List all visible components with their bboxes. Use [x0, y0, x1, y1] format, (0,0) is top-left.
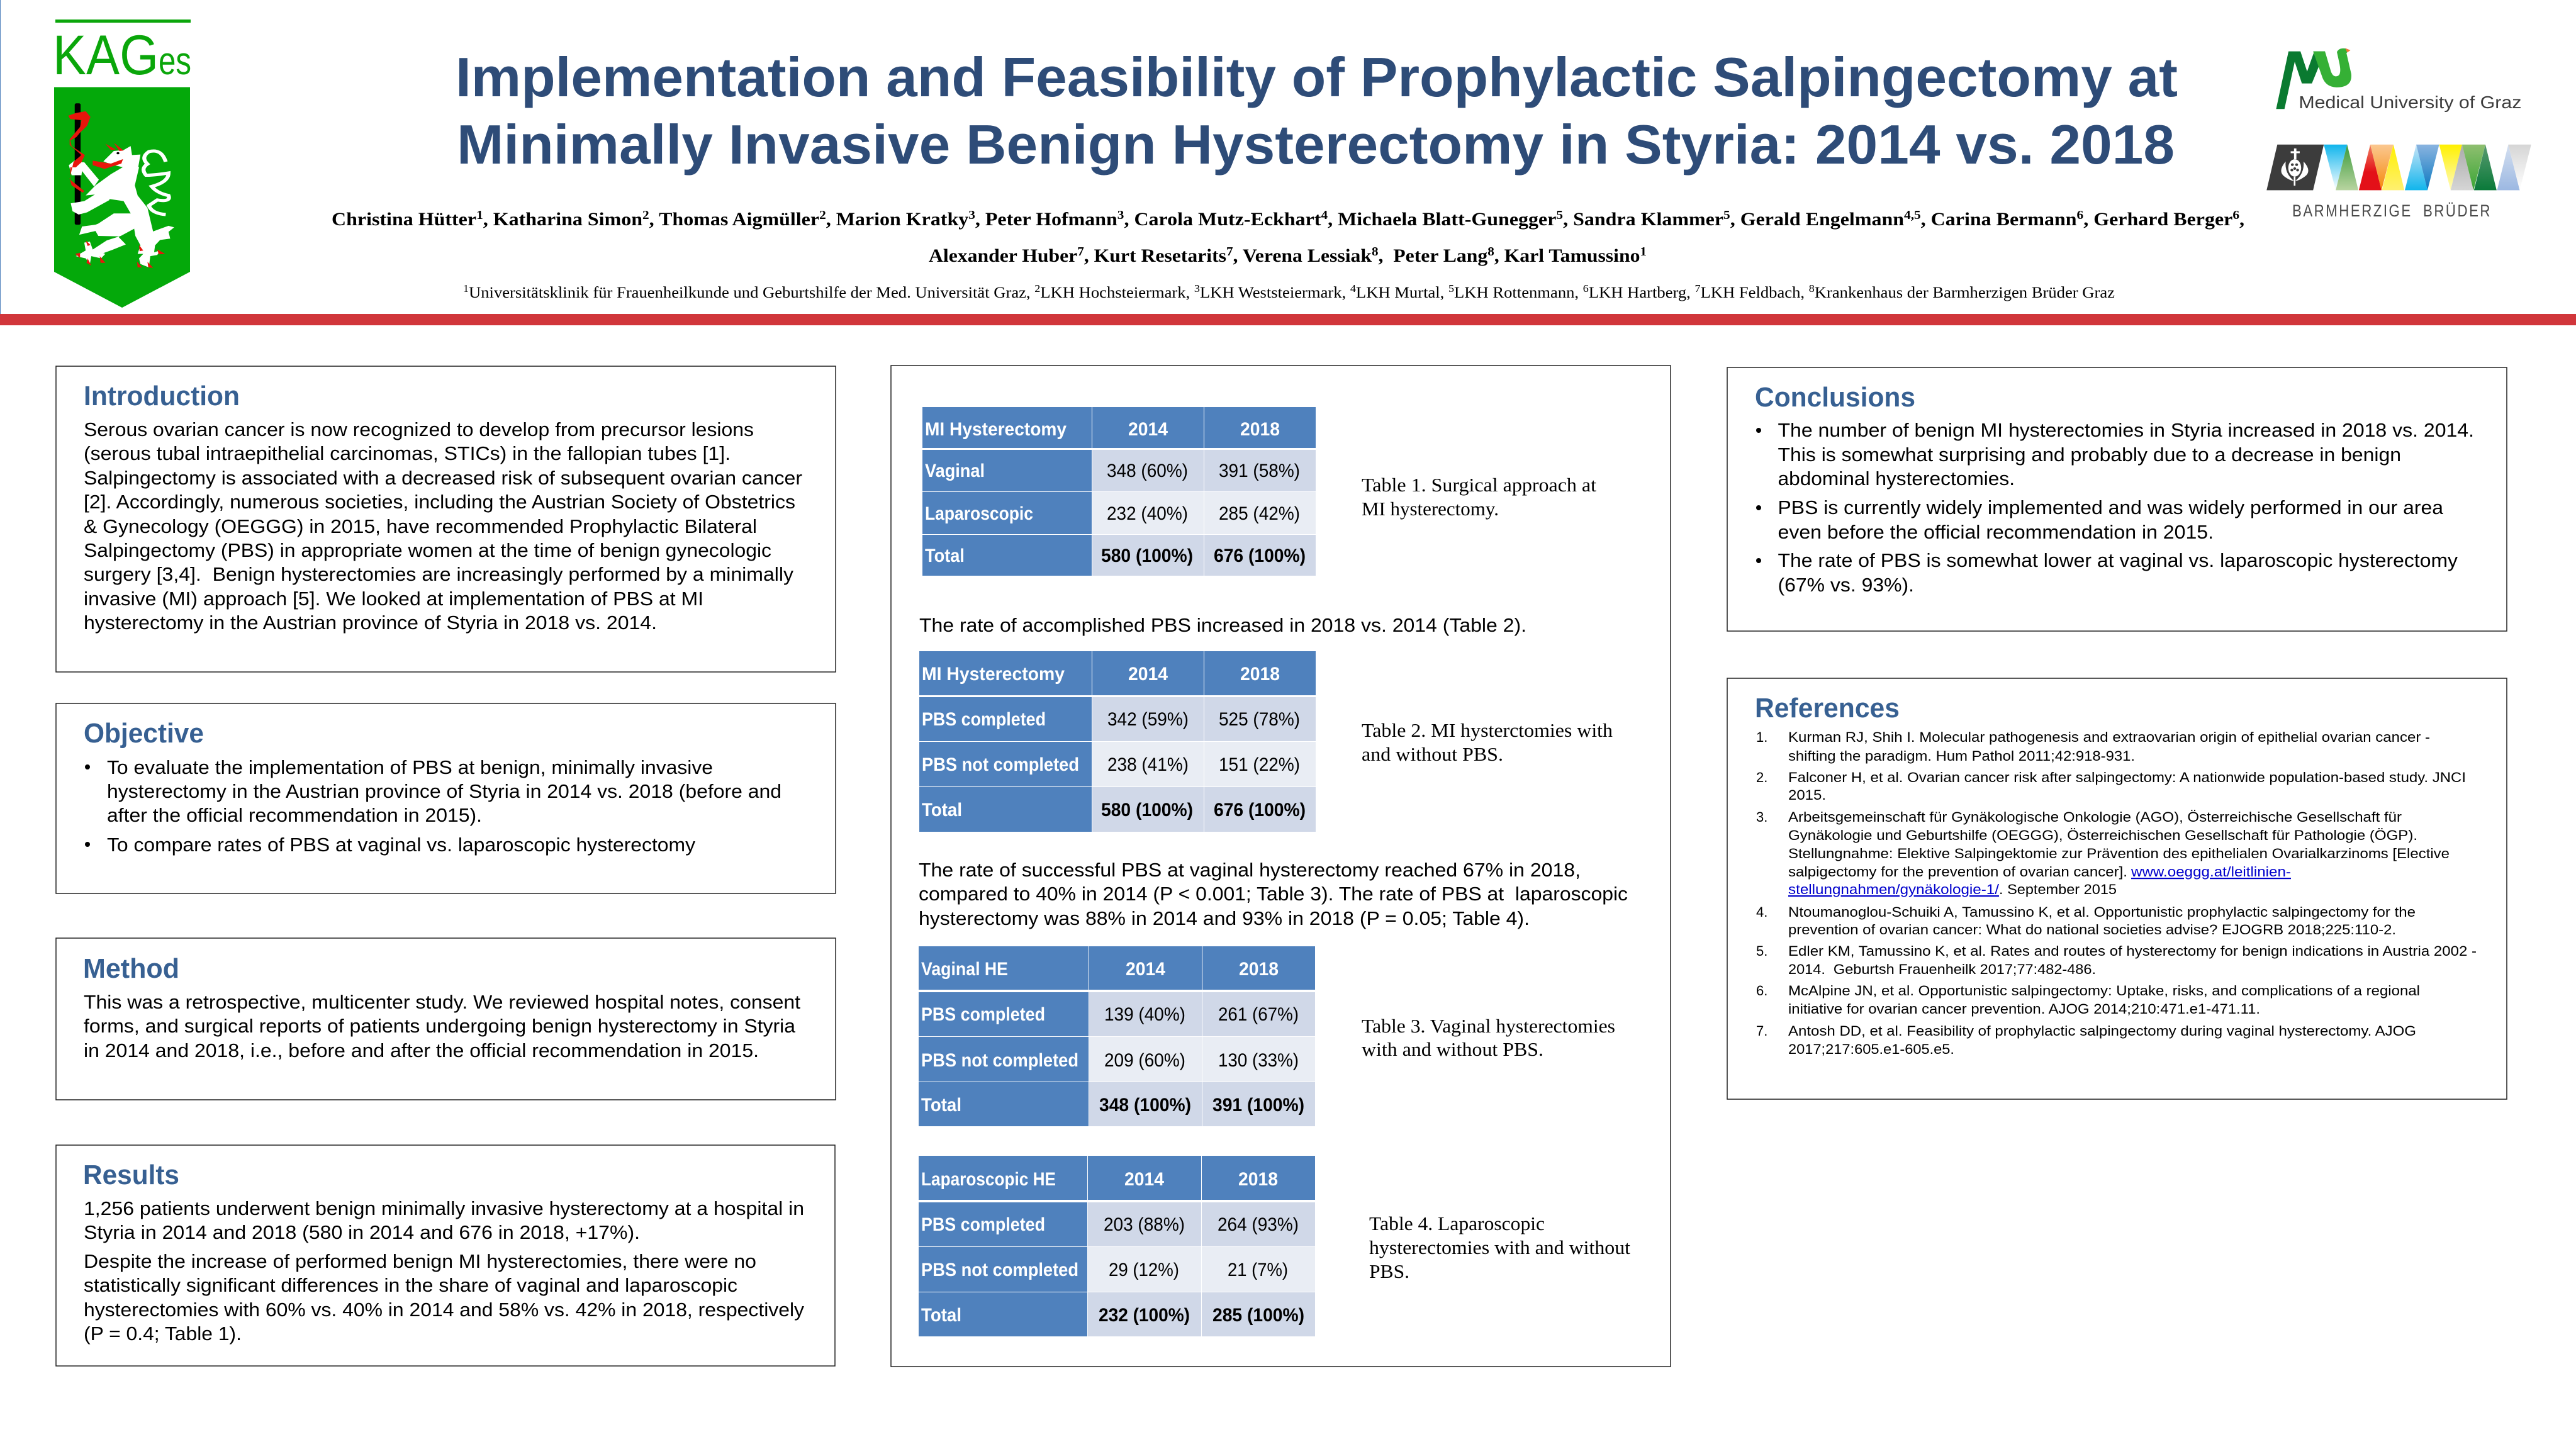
- text: results body: Styria in 2014 and 2018 (580 in 2014 and 676 in 2018, +17%).: [84, 1222, 640, 1243]
- table 4: 232 (100%): [1099, 1305, 1190, 1326]
- caption: table 2: [1362, 719, 1613, 765]
- table 1: 2018: [1240, 419, 1280, 440]
- caption: table 2: Table 2. MI hysterctomies with: [1362, 719, 1613, 741]
- text: introduction body: Salpingectomy is associated with a decreased risk of subsequent ovarian cancer: [84, 467, 802, 489]
- table 1: Laparoscopic: [925, 503, 1033, 524]
- text: reference list: Ntoumanoglou-Schuiki A, Tamussino K, et al. Opportunistic prophylactic salpingectomy for the: [1788, 904, 2416, 920]
- table 2: 525 (78%): [1219, 709, 1300, 730]
- text: reference list: 3.: [1756, 809, 1767, 825]
- text: introduction body: invasive (MI) approach [5]. We looked at implementation of PBS at MI: [84, 588, 703, 610]
- text: reference list: prevention of ovarian cancer: What do national societies advise? EJOGRB 2018;225:110-2.: [1788, 922, 2396, 937]
- text: reference list: 4.: [1756, 904, 1767, 920]
- text: reference list: McAlpine JN, et al. Opportunistic salpingectomy: Uptake, risks, and complications of a regional: [1788, 983, 2420, 999]
- table 2: 2018: [1240, 664, 1280, 685]
- logo: KAGes: es: [159, 40, 191, 83]
- table 4: 21 (7%): [1228, 1260, 1288, 1280]
- table 4: 203 (88%): [1104, 1214, 1185, 1235]
- authors: [332, 208, 2244, 266]
- panel: introduction: [56, 366, 836, 672]
- affiliations: 1Universitätsklinik für Frauenheilkunde und Geburtshilfe der Med. Universität Graz, 2LKH Hochsteiermark, 3LKH Weststeiermark, 4LKH Murtal, 5LKH Rottenmann, 6LKH Hartberg, 7LKH Feldbach, 8Krankenhaus der Barmherzigen Brüder Graz: [463, 283, 2115, 301]
- text: reference list: 5.: [1756, 943, 1767, 959]
- logo: Medical University of Graz: [2276, 48, 2521, 112]
- text: introduction body: Salpingectomy (PBS) in appropriate women at the time of benign gynecologic: [84, 540, 771, 561]
- table 1: [922, 407, 1316, 576]
- text: reference list: Arbeitsgemeinschaft für Gynäkologische Onkologie (AGO), Österreichische Gesellschaft für: [1788, 809, 2402, 825]
- caption: table 2: and without PBS.: [1362, 743, 1503, 765]
- table 3: 2018: [1239, 959, 1279, 980]
- table 4: PBS not completed: [921, 1260, 1078, 1280]
- caption: table 1: Table 1. Surgical approach at: [1362, 474, 1596, 496]
- table 1: 232 (40%): [1107, 503, 1188, 524]
- text: method body: forms, and surgical reports of patients undergoing benign hysterectomy in Styria: [84, 1015, 795, 1037]
- table 3: 139 (40%): [1104, 1004, 1185, 1025]
- title: Minimally Invasive Benign Hysterectomy in Styria: 2014 vs. 2018: [457, 113, 2175, 176]
- table 3: PBS completed: [921, 1004, 1045, 1025]
- table 4: [919, 1156, 1315, 1336]
- text: conclusions bullets: PBS is currently widely implemented and was widely performed in our area: [1778, 497, 2443, 518]
- table 2: 580 (100%): [1101, 800, 1193, 820]
- table 3: 209 (60%): [1104, 1050, 1185, 1071]
- text: results body: Despite the increase of performed benign MI hysterectomies, there were no: [84, 1251, 756, 1272]
- authors: Christina Hütter 1, Katharina Simon 2, Thomas Aigmüller 2, Marion Kratky 3, Peter Hofmann 3, Carola Mutz-Eckhart 4, Michaela Blatt-Gunegger 5, Sandra Klammer 5, Gerald Engelmann 4,5, Carina Bermann 6, Gerhard Berger 6,: [332, 208, 2244, 230]
- text: introduction body: & Gynecology (OEGGG) in 2015, have recommended Prophylactic Bilateral: [84, 516, 757, 537]
- table 1: MI Hysterectomy: [925, 419, 1067, 440]
- text: introduction body: hysterectomy in the Austrian province of Styria in 2018 vs. 2014.: [84, 612, 657, 634]
- table 2: 151 (22%): [1219, 754, 1300, 775]
- table 3: Vaginal HE: [921, 959, 1008, 980]
- text: reference list: . September 2015: [1999, 881, 2117, 897]
- text: conclusions bullets: abdominal hysterectomies.: [1778, 468, 2015, 490]
- text: reference list: stellungnahmen/gynäkologie-1/: [1788, 881, 2000, 897]
- logo: Medical University of Graz: Medical University of Graz: [2299, 92, 2521, 112]
- text: reference list: 7.: [1756, 1023, 1767, 1039]
- text: objective bullets: hysterectomy in the Austrian province of Styria in 2014 vs. 2018 (before and: [107, 781, 781, 802]
- table 2: 238 (41%): [1107, 754, 1189, 775]
- table 4: Laparoscopic HE: [921, 1169, 1056, 1190]
- logo: KAGes: KAG: [53, 23, 159, 86]
- text: introduction body: Serous ovarian cancer is now recognized to develop from precursor lesions: [84, 419, 754, 440]
- text: introduction body: (serous tubal intraepithelial carcinomas, STICs) in the fallopian tubes [1].: [84, 443, 731, 464]
- text: objective bullets: To evaluate the implementation of PBS at benign, minimally invasive: [107, 757, 713, 778]
- table 2: [919, 651, 1316, 832]
- text: conclusions bullets: The rate of PBS is somewhat lower at vaginal vs. laparoscopic hysterectomy: [1778, 550, 2458, 571]
- table 2: 342 (59%): [1107, 709, 1189, 730]
- table 4: PBS completed: [921, 1214, 1045, 1235]
- text: conclusions bullets: (67% vs. 93%).: [1778, 574, 1914, 596]
- caption: table 3: [1362, 1015, 1615, 1060]
- text: reference list: 2015.: [1788, 787, 1826, 803]
- text: table 2 intro: The rate of accomplished PBS increased in 2018 vs. 2014 (Table 2).: [919, 615, 1526, 636]
- red header bar: [0, 314, 2576, 325]
- text: results body: 1,256 patients underwent benign minimally invasive hysterectomy at a hospital in: [84, 1198, 804, 1219]
- heading: introduction: Introduction: [84, 381, 240, 411]
- text: results body: hysterectomies with 60% vs. 40% in 2014 and 58% vs. 42% in 2018, respectively: [84, 1299, 805, 1321]
- text: reference list: 6.: [1756, 983, 1767, 999]
- caption: table 4: Table 4. Laparoscopic: [1369, 1212, 1545, 1234]
- table 4: 2018: [1238, 1169, 1278, 1190]
- table 1: 2014: [1128, 419, 1168, 440]
- panel: objective: [56, 703, 836, 893]
- table 3: PBS not completed: [921, 1050, 1078, 1071]
- text: reference list: Gynäkologie und Geburtshilfe (OEGGG), Österreichischen Gesellschaft für Pathologie (ÖGP).: [1788, 827, 2417, 843]
- table 2: PBS not completed: [922, 754, 1079, 775]
- table 2: 676 (100%): [1214, 800, 1306, 820]
- table 4: Total: [921, 1305, 961, 1326]
- caption: table 1: MI hysterectomy.: [1362, 498, 1499, 520]
- text: objective bullets: after the official recommendation in 2015).: [107, 805, 482, 826]
- caption: table 4: hysterectomies with and without: [1369, 1236, 1630, 1258]
- text: reference list: Edler KM, Tamussino K, et al. Rates and routes of hysterectomy for benign indications in Austria 2002 -: [1788, 943, 2477, 959]
- text: reference list: Antosh DD, et al. Feasibility of prophylactic salpingectomy during vaginal hysterectomy. AJOG: [1788, 1023, 2416, 1039]
- panel: references: [1727, 678, 2507, 1099]
- table 1: Vaginal: [925, 461, 985, 481]
- table 3: 261 (67%): [1218, 1004, 1299, 1025]
- table 1: 676 (100%): [1214, 545, 1306, 566]
- text: reference list: Stellungnahme: Elektive Salpingektomie zur Prävention des epithelialen Ovarialkarzinoms [Elective: [1788, 846, 2450, 861]
- text: table 3 and 4 intro: hysterectomy was 88% in 2014 and 93% in 2018 (P = 0.05; Table 4).: [919, 908, 1530, 929]
- heading: references: References: [1755, 693, 1900, 724]
- text: reference list: www.oeggg.at/leitlinien-: [2131, 864, 2291, 880]
- caption: table 4: [1369, 1212, 1630, 1282]
- text: reference list: 2017;217:605.e1-605.e5.: [1788, 1041, 1954, 1057]
- text: reference list: 1.: [1756, 729, 1767, 745]
- text: reference list: salpigectomy for the prevention of ovarian cancer].: [1788, 864, 2127, 880]
- table 3: 130 (33%): [1218, 1050, 1299, 1071]
- panel: results tables: [891, 366, 1671, 1367]
- text: introduction body: surgery [3,4]. Benign hysterectomies are increasingly performed by a minimally: [84, 564, 794, 585]
- text: reference list: Kurman RJ, Shih I. Molecular pathogenesis and extraovarian origin of epithelial ovarian cancer -: [1788, 729, 2430, 745]
- table 2: MI Hysterectomy: [922, 664, 1065, 685]
- text: reference list: initiative for ovarian cancer prevention. AJOG 2014;210:471.e1-471.11.: [1788, 1001, 2260, 1017]
- text: reference list: [1756, 729, 2477, 1057]
- table 3: 348 (100%): [1099, 1095, 1191, 1116]
- text: table 3 and 4 intro: compared to 40% in 2014 (P < 0.001; Table 3). The rate of PBS at laparoscopic: [919, 883, 1628, 905]
- text: objective bullets: To compare rates of PBS at vaginal vs. laparoscopic hysterectomy: [107, 834, 696, 856]
- table 4: 285 (100%): [1212, 1305, 1304, 1326]
- icon: Styrian panther shield: [54, 87, 190, 308]
- heading: method: Method: [83, 953, 179, 984]
- heading: objective: Objective: [84, 718, 204, 749]
- table 1: 348 (60%): [1107, 461, 1188, 481]
- text: method body: [84, 992, 801, 1061]
- text: table 3 and 4 intro: The rate of successful PBS at vaginal hysterectomy reached 67% in 2018,: [919, 859, 1581, 881]
- table 3: 2014: [1126, 959, 1165, 980]
- table 4: 29 (12%): [1109, 1260, 1179, 1280]
- table 3: [919, 946, 1315, 1126]
- table 4: 264 (93%): [1218, 1214, 1299, 1235]
- text: results body: [84, 1198, 805, 1345]
- caption: table 4: PBS.: [1369, 1260, 1409, 1282]
- table 1: 580 (100%): [1101, 545, 1193, 566]
- text: results body: (P = 0.4; Table 1).: [84, 1323, 242, 1345]
- text: method body: This was a retrospective, multicenter study. We reviewed hospital notes, consent: [84, 992, 801, 1013]
- text: table 3 and 4 intro: [919, 859, 1628, 929]
- table 3: Total: [921, 1095, 961, 1116]
- table 2: PBS completed: [922, 709, 1046, 730]
- logo: Barmherzige Brüder: [2266, 145, 2531, 220]
- title: Implementation and Feasibility of Prophylactic Salpingectomy at: [456, 46, 2178, 108]
- text: objective bullets: [85, 757, 781, 856]
- text: introduction body: [2]. Accordingly, numerous societies, including the Austrian Society of Obstetrics: [84, 491, 795, 513]
- caption: table 3: with and without PBS.: [1362, 1038, 1543, 1060]
- text: results body: statistically significant differences in the share of vaginal and laparoscopic: [84, 1275, 737, 1296]
- text: method body: in 2014 and 2018, i.e., before and after the official recommendation in 2015.: [84, 1040, 759, 1061]
- table 1: 285 (42%): [1219, 503, 1300, 524]
- text: conclusions bullets: even before the official recommendation in 2015.: [1778, 522, 2214, 543]
- title: [456, 46, 2178, 176]
- heading: conclusions: Conclusions: [1755, 382, 1915, 413]
- text: reference list: Falconer H, et al. Ovarian cancer risk after salpingectomy: A nationwide population-based study. JNCI: [1788, 769, 2466, 785]
- panel: method: [56, 938, 836, 1100]
- panel: conclusions: [1727, 367, 2507, 631]
- authors: Alexander Huber 7, Kurt Resetarits 7, Verena Lessiak 8, Peter Lang 8, Karl Tamussino 1: [929, 245, 1647, 266]
- text: conclusions bullets: [1756, 420, 2474, 596]
- text: conclusions bullets: The number of benign MI hysterectomies in Styria increased in 2018 vs. 2014.: [1778, 420, 2474, 441]
- caption: table 1: [1362, 474, 1596, 520]
- text: reference list: shifting the paradigm. Hum Pathol 2011;42:918-931.: [1788, 748, 2135, 764]
- table 1: Total: [925, 545, 965, 566]
- table 2: 2014: [1128, 664, 1168, 685]
- heading: results: Results: [83, 1160, 179, 1190]
- table 2: Total: [922, 800, 962, 820]
- text: reference list: 2.: [1756, 769, 1767, 785]
- text: introduction body: [84, 419, 802, 634]
- table 4: 2014: [1124, 1169, 1164, 1190]
- table 3: 391 (100%): [1212, 1095, 1304, 1116]
- logo: Barmherzige Brüder: BARMHERZIGE BRÜDER: [2292, 201, 2492, 220]
- caption: table 3: Table 3. Vaginal hysterectomies: [1362, 1015, 1615, 1037]
- text: conclusions bullets: This is somewhat surprising and probably due to a decrease in benign: [1778, 444, 2401, 466]
- text: reference list: 2014. Geburtsh Frauenheilk 2017;77:482-486.: [1788, 961, 2096, 977]
- panel: results: [56, 1145, 835, 1366]
- table 1: 391 (58%): [1219, 461, 1300, 481]
